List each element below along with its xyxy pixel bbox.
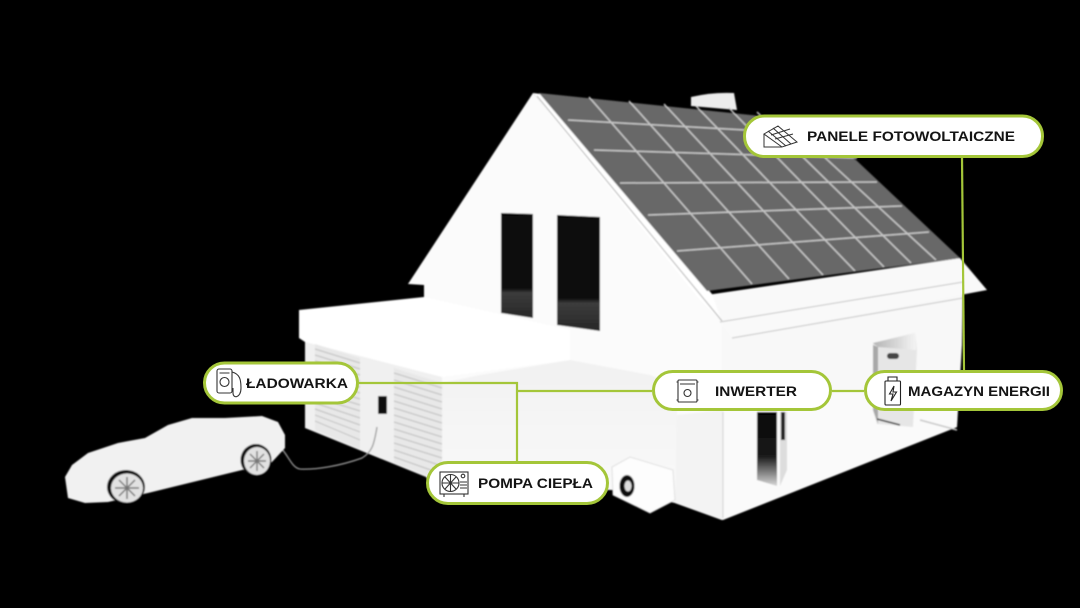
charging cable [281, 427, 377, 469]
label text: INWERTER [715, 384, 797, 399]
front corner wall [675, 410, 723, 520]
label text: MAGAZYN ENERGII [908, 384, 1050, 399]
label: panele fotowoltaiczne [744, 116, 1042, 156]
icon: solar panel [764, 126, 797, 147]
garage flat roof [299, 297, 570, 377]
icon: battery [885, 377, 900, 405]
garage door left [315, 344, 360, 449]
label text: POMPA CIEPŁA [478, 476, 593, 491]
entrance door [757, 412, 787, 486]
front wheel [107, 470, 145, 504]
lower wall shade [442, 360, 677, 503]
connector lines [359, 157, 964, 461]
wall charger [378, 396, 387, 414]
windows [501, 213, 600, 331]
label: magazyn energii [866, 372, 1062, 410]
rear wheel [240, 444, 272, 476]
garage door right [394, 368, 442, 481]
label text: ŁADOWARKA [246, 376, 348, 391]
chimney [691, 93, 737, 110]
right wing wall [675, 288, 963, 520]
icon: inverter [676, 380, 698, 402]
icon: EV charger [217, 369, 241, 397]
roof eave band [533, 93, 987, 338]
roof solar array [539, 93, 960, 291]
label text: PANELE FOTOWOLTAICZNE [807, 129, 1015, 144]
gable wall [408, 93, 722, 520]
battery storage alcove [873, 333, 957, 430]
electric car [65, 416, 285, 504]
label: ładowarka [204, 363, 358, 403]
label: pompa ciepła [428, 462, 608, 504]
outdoor heat pump unit [612, 457, 675, 513]
icon: heat pump [440, 472, 468, 497]
garage wall [305, 340, 442, 482]
house illustration [65, 93, 987, 520]
label: inwerter [654, 372, 830, 410]
